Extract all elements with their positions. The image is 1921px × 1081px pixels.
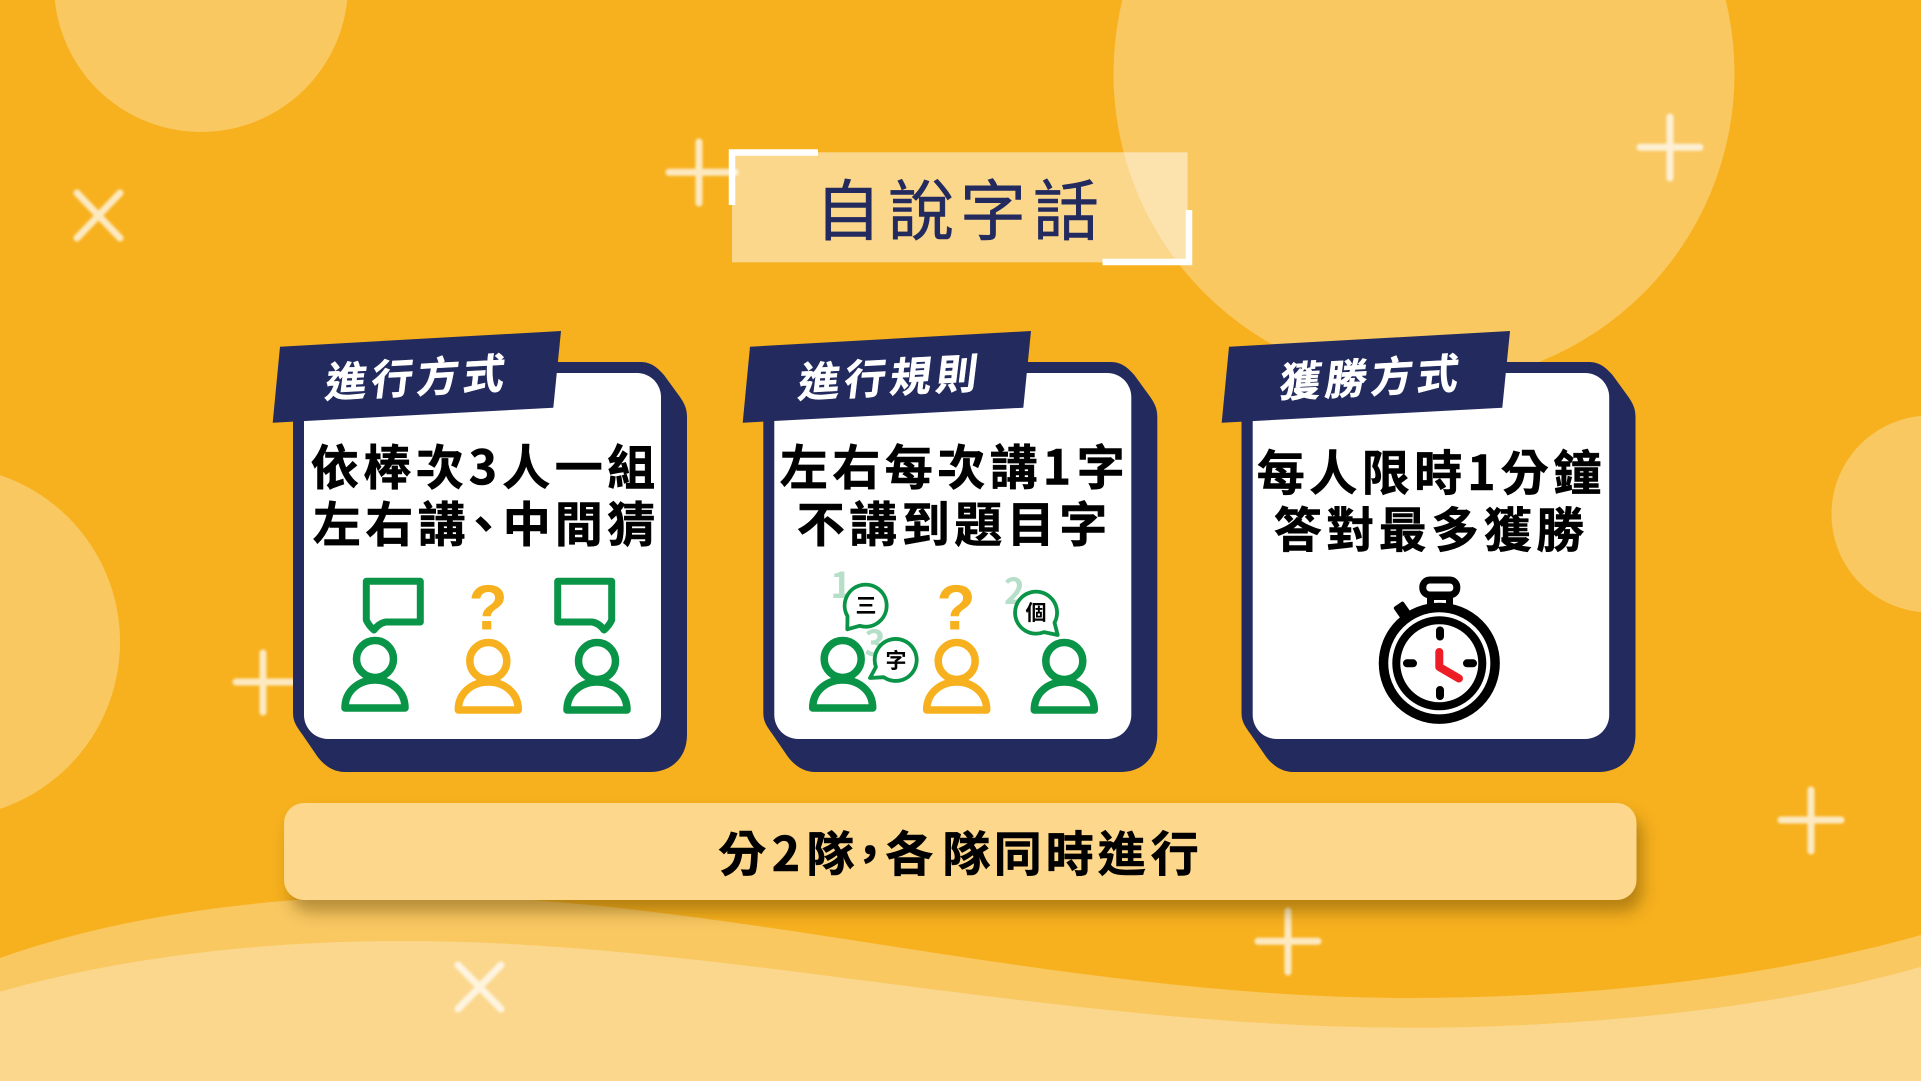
icon: speech bubble 三: 三 xyxy=(856,590,876,620)
icon: speech bubble left xyxy=(366,581,420,630)
panel: 獲勝方式 xyxy=(1222,331,1636,772)
body text: 每人限時1分鐘 xyxy=(1257,434,1601,504)
body text: 答對最多獲勝 xyxy=(1274,491,1584,561)
tab banner xyxy=(273,331,561,423)
body text: 左右每次講1字 xyxy=(780,428,1125,498)
icon: person right xyxy=(1034,642,1094,710)
icon: person middle xyxy=(458,642,518,710)
tab label: 進行規則 xyxy=(795,340,986,411)
icon: stopwatch xyxy=(1384,580,1495,719)
body text: 不講到題目字 xyxy=(797,486,1107,556)
tab banner xyxy=(1222,331,1510,423)
icon: speech bubble 三 xyxy=(845,585,887,629)
card frame xyxy=(763,362,1157,772)
body text: 依棒次3人一組 xyxy=(311,428,655,498)
icon: person right xyxy=(567,642,627,710)
background wave: back layer xyxy=(0,896,1921,1081)
icon: speech bubble 個: 個 xyxy=(1026,597,1046,627)
background circles xyxy=(0,0,1921,818)
order numbers: 2 xyxy=(1004,563,1025,615)
icon: speech bubble 個 xyxy=(1015,592,1058,635)
icon: person middle xyxy=(927,642,987,710)
tab label: 獲勝方式 xyxy=(1276,340,1467,411)
order numbers: 1 xyxy=(830,557,852,609)
card interior xyxy=(304,373,661,739)
card frame xyxy=(1242,362,1636,772)
icon: person left xyxy=(345,640,405,708)
panel: 進行規則 xyxy=(743,331,1157,772)
decorative plus and cross marks xyxy=(77,117,1841,1009)
card interior xyxy=(774,373,1131,739)
order numbers xyxy=(830,557,1025,667)
icon: person left xyxy=(813,640,873,708)
title block xyxy=(732,152,1189,262)
icon: speech bubble 字: 字 xyxy=(886,645,906,675)
tab banner xyxy=(743,331,1031,423)
title background xyxy=(732,152,1188,262)
card interior xyxy=(1253,373,1609,739)
title corner bracket: top left xyxy=(732,152,818,205)
title corner bracket: bottom right xyxy=(1102,210,1189,262)
icon: speech bubble right xyxy=(558,581,612,630)
tab label: 進行方式 xyxy=(322,340,513,411)
order numbers: 3 xyxy=(864,615,886,667)
icon: speech bubble 字 xyxy=(870,639,917,681)
title text: 自說字話 xyxy=(815,158,1099,254)
card frame xyxy=(293,362,687,772)
panel: 進行方式 xyxy=(273,331,687,772)
bar text: 分2隊，各隊同時進行 xyxy=(718,815,1199,885)
bar background xyxy=(284,803,1636,900)
icon: question mark: ? xyxy=(936,572,976,644)
icon: question mark: ? xyxy=(468,572,508,644)
background wave: front layer xyxy=(0,941,1921,1081)
bottom bar xyxy=(284,803,1636,900)
body text: 左右講、中間猜 xyxy=(313,486,655,556)
